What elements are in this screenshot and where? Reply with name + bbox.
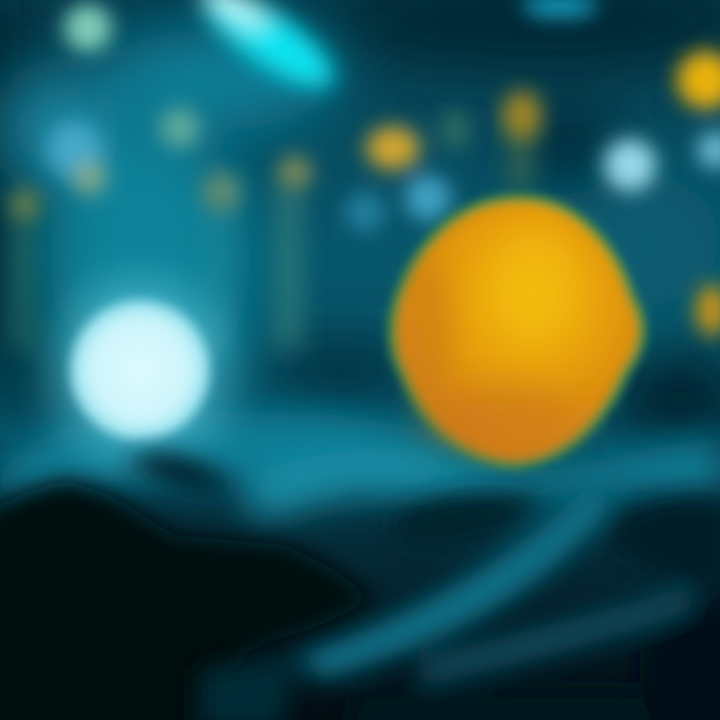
light pillars — [10, 120, 532, 350]
dark terrain at lower right with teal streaks — [200, 485, 720, 720]
white orb — [45, 275, 235, 465]
bokeh lights — [8, 0, 720, 336]
dark mountains at lower left — [0, 453, 375, 720]
background glow and shadow masses — [0, 0, 720, 450]
cyan light streak — [189, 0, 347, 104]
golden orb — [388, 195, 646, 468]
waves: teal ground band — [0, 409, 720, 520]
